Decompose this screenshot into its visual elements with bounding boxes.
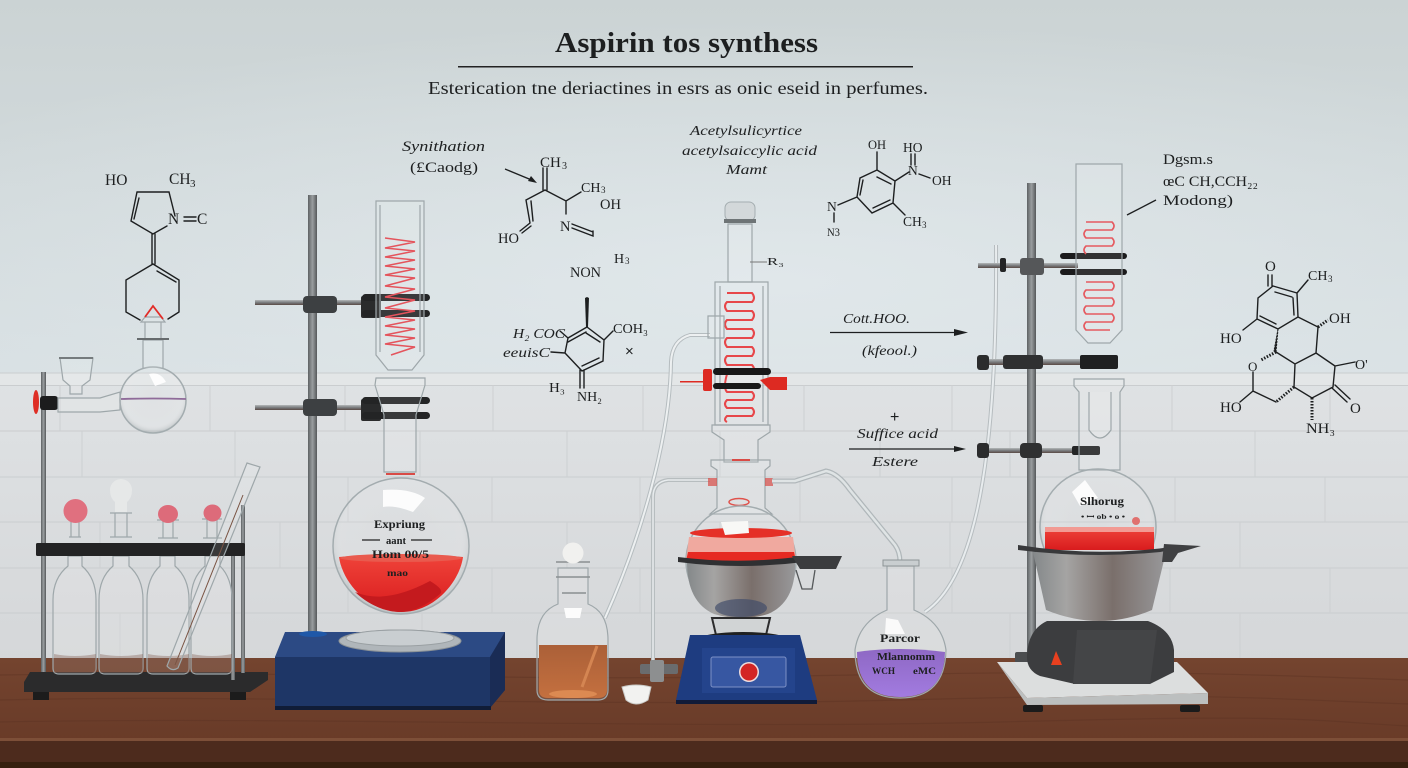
side port <box>708 316 724 338</box>
flask labels <box>362 517 432 578</box>
annotation: Acetylsalicyrice: acetylsaiccylic acid <box>682 144 818 159</box>
molecule: right polycyclic: O <box>1350 401 1361 417</box>
burner <box>697 618 789 648</box>
molecule: top left: N <box>168 211 179 228</box>
stoppers <box>64 479 222 538</box>
molecule: upper centre: HO <box>498 231 519 247</box>
flask labels <box>872 631 936 676</box>
equipment: left stand and round flask <box>33 306 186 680</box>
reaction arrow: lower: + <box>890 409 899 426</box>
glass highlight <box>383 490 425 512</box>
molecule: right polycyclic: HO <box>1220 400 1242 416</box>
dish <box>339 630 461 652</box>
side arm <box>58 392 120 412</box>
flask labels: Mlannomm <box>877 651 935 663</box>
molecule: upper right-centre: 3 <box>922 220 927 230</box>
equipment: central distillation apparatus <box>605 202 900 704</box>
reaction flask <box>686 506 796 616</box>
right delivery arm <box>772 471 900 562</box>
equipment: purple receiving flask <box>855 245 996 698</box>
molecule: right polycyclic: NH₃ <box>1306 421 1335 437</box>
flask labels: Expriung <box>374 517 425 531</box>
molecule: upper right-centre: OH <box>868 138 886 152</box>
rod <box>308 195 317 635</box>
equipment: small white dish <box>622 685 651 704</box>
heating pot <box>1018 544 1201 621</box>
title block <box>428 27 928 98</box>
molecule: upper centre <box>498 155 621 247</box>
condenser <box>376 201 424 370</box>
red liquid <box>1045 527 1154 550</box>
clamps <box>977 253 1127 458</box>
heating pot <box>678 556 842 618</box>
molecule: central formula: NH₂ <box>577 390 602 405</box>
flask labels <box>1080 496 1126 521</box>
left supply tubing <box>605 335 710 618</box>
annotation: right label <box>1127 152 1258 215</box>
flask <box>1040 469 1156 585</box>
reaction arrow: upper <box>830 312 968 358</box>
molecule: top left: 3 <box>190 178 196 190</box>
molecule: central formula: 3 <box>625 256 630 266</box>
molecule: central formula: H <box>614 252 624 267</box>
flask labels: eMC <box>913 666 936 676</box>
molecule: upper centre: 3 <box>562 161 567 172</box>
molecule: right polycyclic <box>1220 259 1368 437</box>
molecule: upper right-centre: CH <box>903 214 922 229</box>
equipment: bottle rack <box>24 463 268 700</box>
small side label: R₃ <box>767 256 784 268</box>
molecule: top left: CH <box>169 171 191 188</box>
molecule: right polycyclic: CH <box>1308 269 1327 284</box>
annotation: Acetylsalicyrice: Acetylsulicyrtice <box>689 124 802 139</box>
round flask <box>120 367 186 433</box>
red clamp <box>680 368 787 391</box>
flask labels: Hom 00/5 <box>372 547 429 561</box>
left support rod <box>640 480 710 682</box>
large flask <box>333 478 469 614</box>
clamp with red knob <box>33 390 58 414</box>
warning triangle <box>1051 651 1062 665</box>
flask labels: Parcor <box>880 631 921 645</box>
molecule: upper right-centre: N <box>827 199 837 214</box>
molecule: upper centre: N <box>560 219 571 235</box>
red liquid <box>339 554 463 612</box>
reaction arrow: lower: Estere <box>871 455 918 470</box>
white hotplate base <box>997 662 1208 712</box>
molecule: upper centre: CH <box>581 181 600 196</box>
annotation: right label: œC CH,CCH₂₂ <box>1163 174 1258 190</box>
table <box>0 658 1408 768</box>
molecule: central formula: COH₃ <box>613 322 648 337</box>
purple liquid <box>857 649 945 697</box>
red band <box>386 473 415 475</box>
rack shelf <box>36 543 245 556</box>
molecule: central formula: H₂ COC <box>512 327 566 342</box>
receiving joint <box>375 378 425 472</box>
molecule: upper centre: CH <box>540 155 561 171</box>
molecule: top left: C <box>197 211 207 228</box>
molecule: upper right-centre: HO <box>903 140 923 155</box>
glass rod <box>582 646 597 687</box>
blue control base <box>676 635 817 704</box>
condenser <box>715 282 768 425</box>
molecule: right polycyclic: O' <box>1355 358 1368 373</box>
test tube <box>167 463 260 670</box>
flask labels: WCH <box>872 666 895 676</box>
molecule: upper right-centre: N3 <box>827 225 840 239</box>
molecule: central formula: NON <box>570 265 602 281</box>
highlight <box>1072 480 1098 506</box>
flask labels: aant <box>386 536 407 547</box>
receiving joint <box>1074 379 1124 470</box>
molecule: central formula: eeuisC <box>503 346 551 361</box>
annotation: Synithation: (£Caodg) <box>410 160 478 176</box>
small funnel cup <box>60 358 93 394</box>
molecule: right polycyclic: HO <box>1220 331 1242 347</box>
molecule: right polycyclic: O <box>1265 259 1276 275</box>
reaction arrow: upper: (kfeool.) <box>862 343 918 358</box>
highlight <box>885 618 905 634</box>
reaction arrow: lower: Suffice acid <box>857 427 939 442</box>
title: Aspirin tos synthess <box>555 27 818 59</box>
molecule: right polycyclic: O <box>1248 359 1257 374</box>
equipment: central left stand with large flask <box>255 195 505 710</box>
molecule: central formula: × <box>625 343 634 360</box>
reaction arrow: upper: Cott.HOO. <box>843 312 910 327</box>
amber liquid <box>539 645 607 698</box>
subtitle: Esterication tne deriactines in esrs as onic eseid in perfumes. <box>428 78 928 98</box>
rack base <box>24 672 268 700</box>
annotation: right label: Dgsm.s <box>1163 152 1213 168</box>
annotation: Acetylsalicyrice <box>682 124 818 178</box>
clamps <box>255 294 430 421</box>
highlight <box>564 608 582 618</box>
annotation: Synithation <box>402 139 537 183</box>
heater body <box>1027 621 1174 684</box>
molecule: central formula <box>503 252 648 405</box>
annotation: Acetylsalicyrice: Mamt <box>725 163 768 178</box>
molecule: central formula: H₃ <box>549 380 565 395</box>
molecule: top left: HO <box>105 172 127 189</box>
annotation: right label: Modong) <box>1163 193 1233 209</box>
flask labels: mao <box>387 568 409 578</box>
condenser <box>1076 164 1122 343</box>
stopper and neck <box>724 202 756 282</box>
molecule: upper centre: OH <box>600 197 621 213</box>
molecule: right polycyclic: OH <box>1329 311 1351 327</box>
molecule: top left <box>105 171 207 320</box>
equipment: right stand and flask on heater <box>977 164 1208 712</box>
molecule: right polycyclic: 3 <box>1328 274 1333 284</box>
base <box>275 632 505 710</box>
bottles <box>53 556 232 674</box>
equipment: amber reagent bottle <box>537 542 608 700</box>
pink and red liquid <box>686 521 796 561</box>
reaction arrow: lower <box>849 409 966 470</box>
molecule: upper centre: 3 <box>601 185 606 195</box>
flask labels: • ꟷ ob • o • <box>1081 513 1126 521</box>
molecule: upper right-centre: N <box>908 163 918 178</box>
flask labels: Slhorug <box>1080 496 1124 508</box>
annotation: Synithation: Synithation <box>402 139 485 155</box>
molecule: upper right-centre: OH <box>932 173 952 188</box>
stopper <box>556 542 590 593</box>
lower joint <box>712 425 770 462</box>
rod <box>1027 183 1036 663</box>
molecule: upper right-centre <box>827 138 952 239</box>
